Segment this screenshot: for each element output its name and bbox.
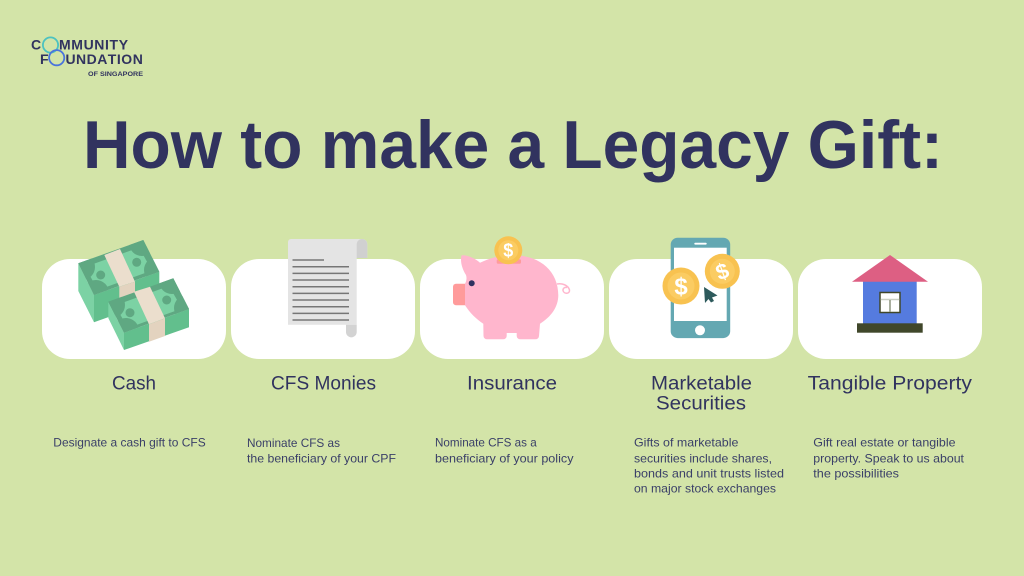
panel: Insurance — [420, 236, 604, 465]
panel: CFS Monies — [231, 239, 415, 465]
panel: Tangible Property — [798, 255, 982, 481]
description: Tangible Property: property. Speak to us about — [813, 451, 965, 465]
description: Marketable Securities: on major stock exchanges — [634, 482, 776, 496]
description: Marketable Securities: securities include shares, — [634, 451, 772, 465]
description: Marketable Securities: bonds and unit trusts listed — [634, 467, 784, 481]
label: Marketable Securities — [651, 374, 752, 414]
logo: Community Foundation of Singapore — [31, 36, 143, 78]
label: Cash: Cash — [112, 374, 156, 394]
description: Marketable Securities: Gifts of marketable — [634, 436, 739, 450]
description: Insurance: Nominate CFS as a — [435, 436, 537, 450]
logo: Community Foundation of Singapore: FOUNDATION — [40, 51, 143, 67]
description: Tangible Property — [813, 436, 965, 481]
icon: piggy bank with coin: $ — [503, 240, 513, 260]
icon: phone with coins — [662, 238, 740, 338]
icon: stacks of money — [78, 240, 189, 350]
description: Marketable Securities — [634, 436, 784, 496]
card: Marketable Securities — [609, 259, 793, 359]
label: CFS Monies: CFS Monies — [271, 374, 376, 394]
description: Insurance — [435, 436, 574, 465]
logo: Community Foundation of Singapore: COMMUNITY — [31, 36, 129, 52]
icon: phone with coins: $ — [712, 258, 732, 285]
label: Marketable Securities: Securities — [656, 394, 746, 414]
panel: Marketable Securities — [609, 238, 793, 496]
card: Tangible Property — [798, 259, 982, 359]
icon: piggy bank with coin — [453, 236, 570, 339]
icon: house — [852, 255, 928, 333]
description: cash: Designate a cash gift to CFS — [53, 436, 206, 450]
description: Tangible Property: Gift real estate or tangible — [813, 436, 956, 450]
icon: phone with coins: $ — [674, 274, 688, 300]
description: CFS Monies: the beneficiary of your CPF — [247, 451, 396, 465]
logo: Community Foundation of Singapore: OF SINGAPORE — [88, 71, 143, 78]
panel: cash — [42, 230, 226, 450]
card: cash — [42, 259, 226, 359]
card: Insurance — [420, 259, 604, 359]
icon: document scroll — [288, 239, 367, 337]
title: How to make a Legacy Gift: — [83, 108, 943, 183]
description: CFS Monies — [247, 436, 396, 465]
label: Insurance: Insurance — [467, 374, 557, 394]
description: CFS Monies: Nominate CFS as — [247, 436, 340, 450]
card: CFS Monies — [231, 259, 415, 359]
description: Insurance: beneficiary of your policy — [435, 451, 574, 465]
description: Tangible Property: the possibilities — [813, 467, 899, 481]
label: Marketable Securities: Marketable — [651, 374, 752, 394]
label: Tangible Property: Tangible Property — [808, 374, 973, 394]
